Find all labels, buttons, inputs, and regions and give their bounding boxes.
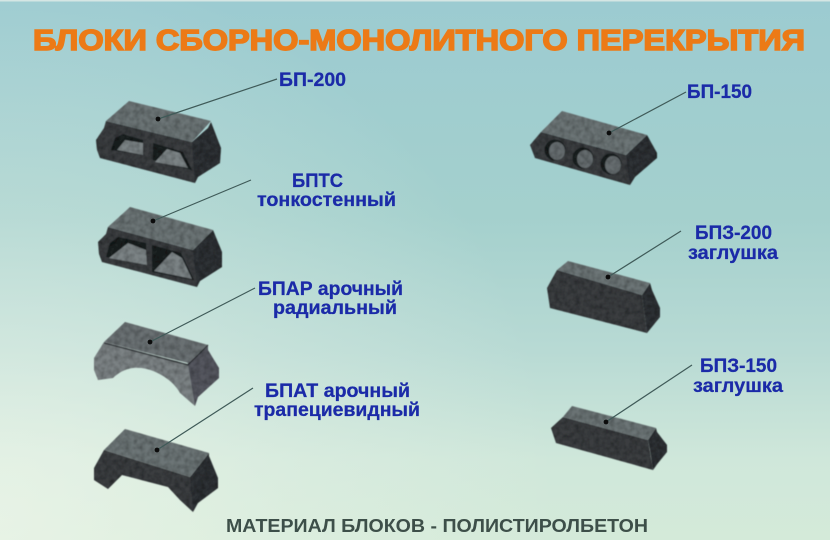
label: БПЗ-150 заглушка: БПЗ-150 bbox=[700, 356, 777, 377]
label: БПЗ-200 заглушка bbox=[688, 223, 778, 264]
block: БПАР арочный радиальный bbox=[94, 288, 255, 406]
block: БП-150 bbox=[530, 92, 686, 185]
block: БПАТ арочный трапециевидный bbox=[94, 388, 253, 512]
label: БПТС тонкостенный: БПТС bbox=[292, 171, 343, 192]
block: БПЗ-200 bbox=[547, 231, 681, 333]
label: БПЗ-150 заглушка: заглушка bbox=[693, 376, 783, 397]
block: БПТС bbox=[98, 180, 251, 287]
label: БП-200: БП-200 bbox=[279, 70, 346, 91]
title: БЛОКИ СБОРНО-МОНОЛИТНОГО ПЕРЕКРЫТИЯ bbox=[33, 25, 805, 57]
label: БПАТ арочный трапециевидный: БПАТ арочный bbox=[265, 381, 410, 402]
label: БПТС тонкостенный bbox=[257, 171, 396, 211]
label: БП-150: БП-150 bbox=[687, 82, 752, 103]
label: БПАР арочный радиальный bbox=[258, 279, 403, 319]
label: БПАР арочный радиальный: БПАР арочный bbox=[258, 279, 403, 300]
label: БПАТ арочный трапециевидный bbox=[254, 381, 420, 421]
label: БПТС тонкостенный: тонкостенный bbox=[257, 190, 396, 211]
label: БПАТ арочный трапециевидный: трапециевидный bbox=[254, 400, 420, 421]
block: БП-200 bbox=[96, 79, 277, 183]
label: БПЗ-200 заглушка: заглушка bbox=[688, 243, 778, 264]
label: БПАР арочный радиальный: радиальный bbox=[273, 298, 397, 319]
block: БПЗ-150 bbox=[551, 365, 692, 470]
label: БПЗ-200 заглушка: БПЗ-200 bbox=[695, 223, 772, 244]
footer: material note: МАТЕРИАЛ БЛОКОВ - ПОЛИСТИРОЛБЕТОН bbox=[226, 516, 648, 536]
label: БПЗ-150 заглушка bbox=[693, 356, 783, 397]
